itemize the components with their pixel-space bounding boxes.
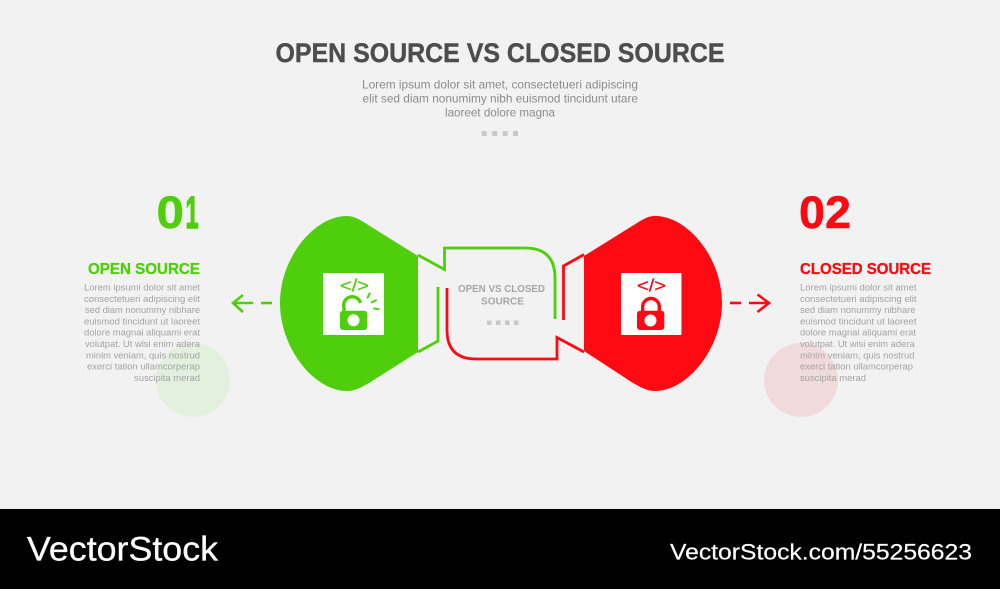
body text: open source: Lorem ipsumi dolor sit amet: [84, 282, 200, 292]
red filled blob: [584, 216, 722, 391]
center label: [458, 284, 545, 308]
subtitle text block: laoreet dolore magna: [445, 106, 555, 120]
panel: open source text: [84, 187, 201, 383]
center label: OPEN VS CLOSED: [458, 284, 545, 295]
body text: closed source: dolore magnai aliquami erat: [800, 327, 916, 338]
decorative circle: red: [764, 343, 838, 417]
icon: open padlock with code: </>: [340, 276, 369, 296]
arrow: left green dashed: [233, 295, 272, 312]
body text: closed source: volutpat. Ut wisi enim adera: [800, 338, 915, 349]
body text: open source: volutpat. Ut wisi enim adera: [85, 338, 201, 349]
icon: closed padlock with code: [621, 273, 682, 335]
green outline: [418, 248, 555, 352]
center dots: [487, 320, 518, 325]
body text: closed source: [800, 282, 917, 383]
arrow: right red dashed: [730, 294, 769, 312]
heading: open source: OPEN SOURCE: [88, 261, 200, 278]
body text: open source: minim veniam, quis nostrud: [86, 349, 200, 360]
body text: closed source: suscipita merad: [800, 372, 866, 383]
body text: closed source: sed diam nonummy nibhare: [800, 304, 916, 315]
footer url text: VectorStock.com/55256623: [670, 539, 972, 564]
center label: SOURCE: [481, 296, 524, 308]
decorative circle: green: [156, 343, 230, 417]
body text: open source: euismod tincidunt ut laoreet: [84, 315, 200, 326]
red outline: [447, 254, 584, 359]
body text: open source: exerci tation ullamcorperap: [87, 361, 200, 372]
number 02: 02: [799, 187, 851, 238]
subtitle text block: Lorem ipsum dolor sit amet, consectetueri adipiscing: [362, 78, 638, 92]
body text: closed source: exerci tation ullamcorperap: [800, 361, 913, 372]
body text: closed source: minim veniam, quis nostrud: [800, 349, 914, 360]
number 01: [156, 187, 198, 238]
body text: open source: suscipita merad: [134, 372, 200, 383]
footer bar: [0, 509, 1000, 589]
heading: closed source: CLOSED SOURCE: [800, 261, 931, 278]
number 01: 1: [186, 187, 198, 238]
icon: closed padlock with code: </>: [637, 276, 666, 296]
green shape with lock icon: [280, 216, 555, 391]
subtitle text block: elit sed diam nonumimy nibh euismod tincidunt utare: [362, 92, 638, 106]
green filled blob: [280, 216, 418, 391]
red shape with lock icon: [447, 216, 722, 391]
panel: closed source text: [799, 187, 931, 383]
icon: open padlock with code: [323, 273, 384, 335]
title dots: [482, 131, 518, 136]
body text: open source: dolore magnai aliquami erat: [84, 327, 200, 338]
body text: open source: consectetueri adipiscing elit: [84, 293, 200, 304]
body text: closed source: euismod tincidunt ut laoreet: [800, 315, 917, 326]
number 01: 0: [156, 187, 184, 238]
body text: closed source: consectetueri adipiscing elit: [800, 293, 917, 304]
title: OPEN SOURCE VS CLOSED SOURCE: [276, 38, 724, 68]
subtitle text block: [362, 78, 638, 120]
body text: open source: sed diam nonummy nibhare: [85, 304, 200, 315]
body text: open source: [84, 282, 201, 383]
footer logo text: VectorStock: [27, 530, 219, 568]
body text: closed source: Lorem ipsumi dolor sit amet: [800, 282, 917, 292]
